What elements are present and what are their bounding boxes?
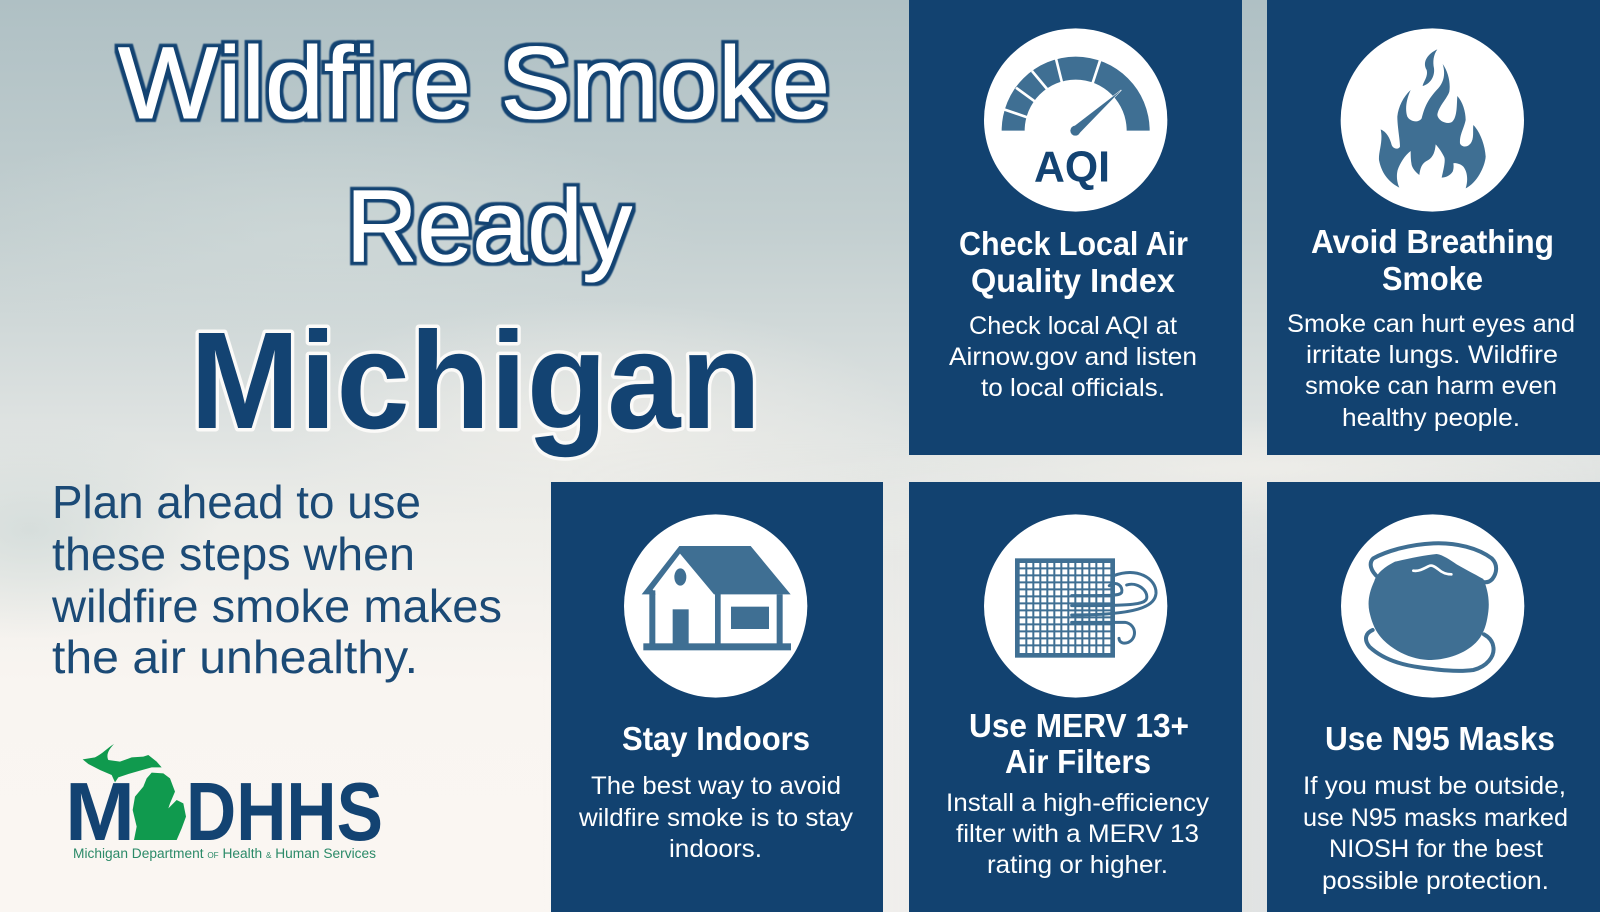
body text: healthy people. [1342, 404, 1520, 432]
body text: Airnow.gov and listen [949, 343, 1197, 371]
body text: If you must be outside, [1303, 772, 1566, 800]
body text: to local officials. [981, 374, 1165, 402]
body text: NIOSH for the best [1329, 835, 1543, 863]
heading: Quality Index [971, 262, 1176, 299]
heading: Use N95 Masks [1325, 720, 1555, 757]
body text: possible protection. [1322, 867, 1549, 895]
body text [578, 772, 854, 863]
body text: filter with a MERV 13 [956, 820, 1199, 848]
body text [1303, 772, 1568, 895]
panel: use MERV 13+ air filters [909, 482, 1242, 912]
logo letter M: M [65, 765, 135, 858]
heading: Air Filters [1005, 743, 1151, 780]
intro text: wildfire smoke makes [51, 580, 502, 632]
logo: Michigan map [83, 744, 186, 840]
body text: irritate lungs. Wildfire [1306, 341, 1558, 369]
body text [949, 312, 1197, 402]
body text: indoors. [669, 835, 762, 863]
title line: Ready: Ready [346, 169, 632, 283]
panel: avoid breathing smoke [1267, 0, 1600, 455]
title line: Wildfire Smoke: Wildfire Smoke [118, 26, 830, 140]
heading [969, 707, 1189, 780]
icon: flame [1341, 28, 1524, 212]
body text [946, 789, 1210, 879]
body text: wildfire smoke is to stay [578, 804, 854, 832]
panel: stay indoors [551, 482, 883, 912]
icon: N95 mask [1341, 514, 1524, 698]
heading: Check Local Air [959, 225, 1188, 262]
body text: use N95 masks marked [1303, 804, 1568, 832]
heading: Use MERV 13+ [969, 707, 1189, 744]
heading [1311, 223, 1554, 297]
intro text: Plan ahead to use [52, 476, 421, 528]
heading: Avoid Breathing [1311, 223, 1554, 260]
icon: air filter [984, 514, 1167, 698]
icon: house [624, 514, 807, 698]
title [118, 26, 830, 458]
intro text: the air unhealthy. [52, 631, 418, 683]
intro text: these steps when [52, 528, 415, 580]
intro text [51, 476, 502, 683]
panel: check local air quality index [909, 0, 1242, 455]
icon: AQI gauge: AQI [1034, 144, 1110, 192]
icon: AQI gauge [984, 28, 1167, 212]
logo: MDHHS [65, 744, 383, 861]
body text: Smoke can hurt eyes and [1287, 310, 1575, 338]
body text: smoke can harm even [1305, 372, 1557, 400]
heading [959, 225, 1188, 299]
body text [1287, 310, 1575, 432]
logo letters DHHS: DHHS [186, 765, 383, 858]
body text: Install a high-efficiency [946, 789, 1210, 817]
body text: rating or higher. [987, 851, 1168, 879]
body text: The best way to avoid [591, 772, 841, 800]
title line: Michigan: Michigan [190, 304, 761, 458]
logo subtitle: Michigan Department OF Health & Human Services [73, 846, 376, 861]
heading: Stay Indoors [622, 720, 810, 757]
heading: Smoke [1382, 260, 1483, 297]
panel: use N95 masks [1267, 482, 1600, 912]
body text: Check local AQI at [969, 312, 1177, 340]
